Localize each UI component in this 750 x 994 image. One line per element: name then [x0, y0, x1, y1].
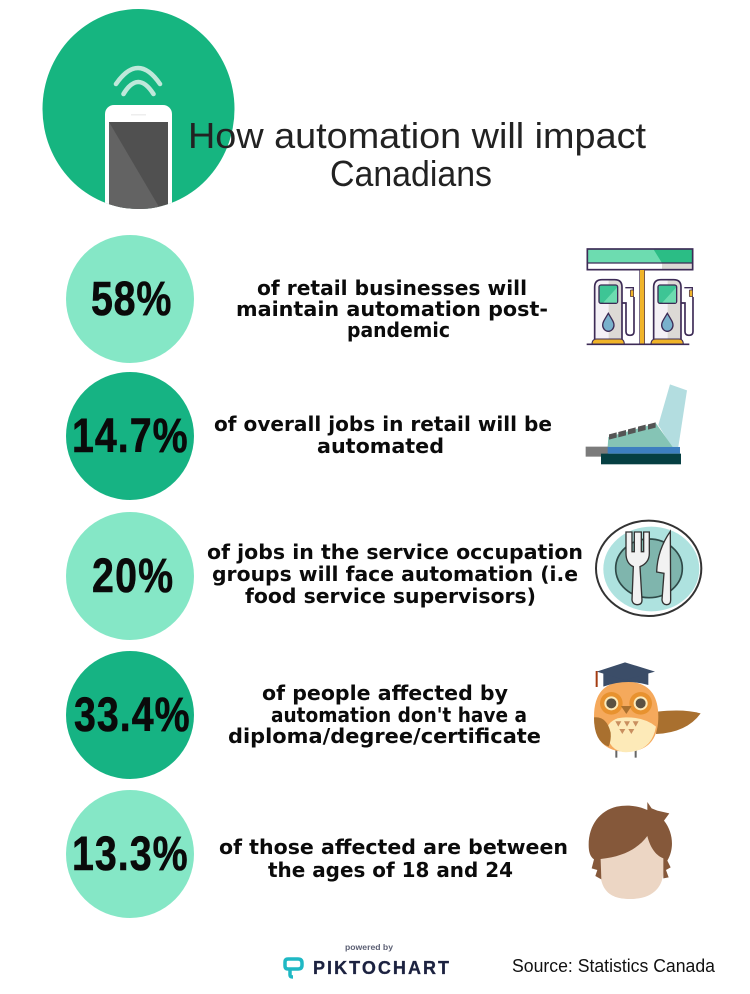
stat circle: 33.4%: 33.4% — [74, 688, 190, 742]
title: Canadians — [330, 153, 492, 194]
text: retail jobs — [214, 412, 552, 458]
icon: young person's face — [589, 802, 672, 899]
text: retail businesses: of retail businesses will — [257, 276, 527, 300]
stat circle: 14.7% — [66, 372, 194, 500]
icon: phone with wifi in green circle — [42, 9, 234, 225]
text: education: automation don't have a — [271, 703, 527, 727]
text: service occupations — [207, 540, 583, 608]
title — [188, 115, 646, 194]
icon: cash register — [586, 384, 687, 464]
panel: education statistic — [66, 651, 701, 779]
panel: retail jobs statistic — [66, 372, 687, 500]
stat circle: 13.3%: 13.3% — [72, 827, 188, 881]
title: How automation will impact — [188, 115, 646, 156]
logo: powered by Piktochart — [285, 943, 449, 978]
stat circle: 14.7%: 14.7% — [72, 409, 188, 463]
text: service occupations: groups will face automation (i.e — [212, 562, 578, 586]
logo: powered by Piktochart: PIKTOCHART — [313, 958, 449, 978]
text: education: of people affected by — [262, 681, 508, 705]
text: service occupations: food service supervisors) — [245, 584, 536, 608]
stat circle: 20%: 20% — [92, 549, 173, 603]
text: age group: the ages of 18 and 24 — [268, 858, 513, 882]
panel: retail businesses statistic — [66, 235, 693, 363]
stat circle: 20% — [66, 512, 194, 640]
text: retail jobs: of overall jobs in retail will be — [214, 412, 552, 436]
stat circle: 33.4% — [66, 651, 194, 779]
stat circle: 58%: 58% — [91, 272, 171, 326]
text: education — [228, 681, 541, 748]
text: retail businesses: pandemic — [347, 318, 450, 342]
panel: age statistic — [66, 790, 672, 918]
text: age group: of those affected are between — [219, 835, 568, 859]
icon: owl with graduation cap — [594, 662, 701, 758]
text: education: diploma/degree/certificate — [228, 724, 541, 748]
source note: Source: Statistics Canada — [512, 956, 716, 976]
text: retail businesses — [236, 276, 548, 342]
stat circle: 58% — [66, 235, 194, 363]
stat circle: 13.3% — [66, 790, 194, 918]
text: age group — [219, 835, 568, 882]
text: service occupations: of jobs in the service occupation — [207, 540, 583, 564]
panel: service occupations statistic — [66, 512, 701, 640]
text: retail jobs: automated — [317, 434, 444, 458]
icon: plate with fork and knife — [596, 521, 701, 616]
text: retail businesses: maintain automation post- — [236, 297, 548, 321]
logo: powered by Piktochart: powered by — [345, 943, 394, 952]
icon: fuel pumps — [587, 249, 693, 344]
